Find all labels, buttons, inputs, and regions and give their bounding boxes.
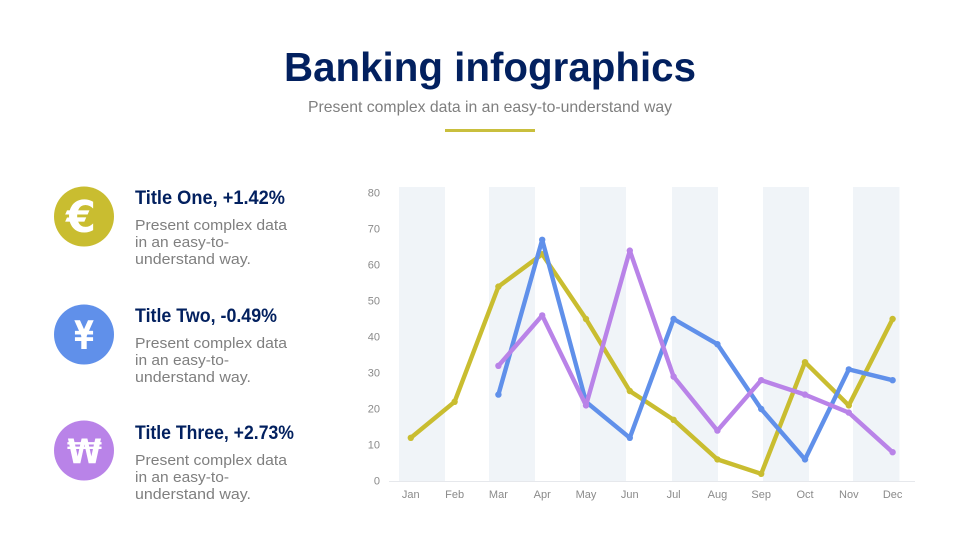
y axis labels: 10 xyxy=(368,440,380,452)
series: olive xyxy=(408,251,896,477)
x axis labels: May xyxy=(576,489,597,501)
text block: item two: Present complex data xyxy=(135,335,288,352)
icon: yen: ¥ xyxy=(74,314,94,359)
text block: item one: Present complex data xyxy=(135,217,288,234)
heading: title one: Title One, +1.42% xyxy=(135,188,285,209)
y axis labels: 60 xyxy=(368,260,380,272)
icon: yen xyxy=(54,304,114,364)
x axis labels: Oct xyxy=(796,489,814,501)
y axis labels: 40 xyxy=(368,332,380,344)
panel: item two xyxy=(54,304,288,386)
text block: item one: understand way. xyxy=(135,251,251,268)
text block: item three: Present complex data xyxy=(135,452,288,469)
y axis labels: 80 xyxy=(368,188,380,200)
x axis labels: Nov xyxy=(839,489,859,501)
panel: item three xyxy=(54,420,294,503)
text block: item two: understand way. xyxy=(135,369,251,386)
chart column bands xyxy=(399,187,900,481)
heading: title two: Title Two, -0.49% xyxy=(135,306,277,327)
x axis labels: Feb xyxy=(445,489,464,501)
y axis labels: 50 xyxy=(368,296,380,308)
y axis labels: 20 xyxy=(368,404,380,416)
y axis labels: 30 xyxy=(368,368,380,380)
x axis labels: Apr xyxy=(534,489,551,501)
text block: item three: understand way. xyxy=(135,486,251,503)
series: purple xyxy=(495,247,896,455)
line chart xyxy=(368,187,915,501)
text block: item one: in an easy-to- xyxy=(135,234,229,251)
icon: won: ₩ xyxy=(67,432,102,472)
x axis labels: Mar xyxy=(489,489,508,501)
header xyxy=(284,44,696,132)
y axis labels xyxy=(368,188,380,488)
x axis labels: Dec xyxy=(883,489,903,501)
x axis labels: Jan xyxy=(402,489,420,501)
accent underline xyxy=(445,129,535,132)
x axis labels: Jun xyxy=(621,489,639,501)
subtitle: Present complex data in an easy-to-understand way xyxy=(308,99,672,116)
y axis labels: 0 xyxy=(374,476,380,488)
x axis labels xyxy=(402,489,903,501)
icon: won xyxy=(54,420,114,480)
panel: item one xyxy=(54,186,288,268)
heading: title three: Title Three, +2.73% xyxy=(135,423,294,444)
x axis labels: Jul xyxy=(667,489,681,501)
icon: euro: € xyxy=(65,192,96,243)
x axis labels: Aug xyxy=(708,489,727,501)
icon: euro xyxy=(54,186,114,246)
x axis labels: Sep xyxy=(751,489,771,501)
title: Banking infographics xyxy=(284,44,696,90)
series: blue xyxy=(495,237,896,463)
text block: item two: in an easy-to- xyxy=(135,352,229,369)
text block: item three: in an easy-to- xyxy=(135,469,229,486)
y axis labels: 70 xyxy=(368,224,380,236)
